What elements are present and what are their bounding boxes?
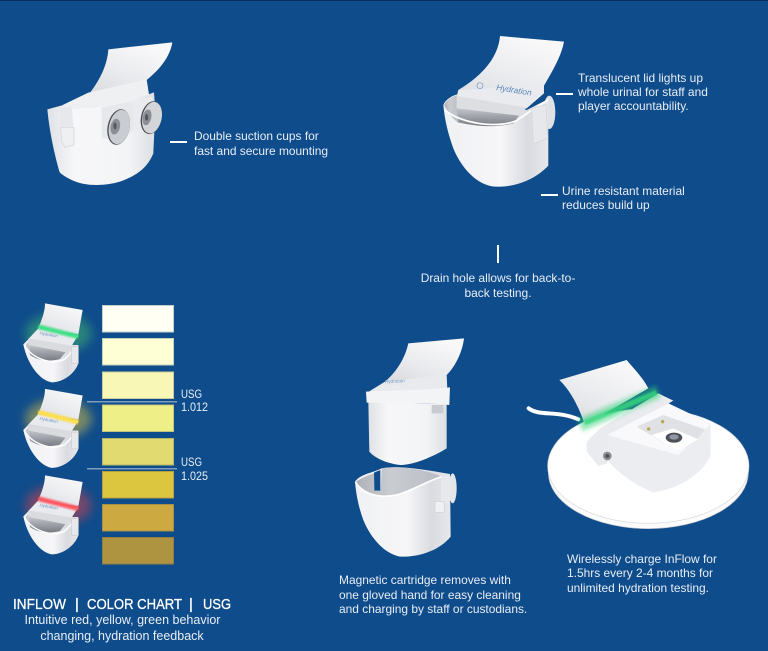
- device body: [587, 393, 711, 492]
- suction cup left: [104, 107, 133, 147]
- chart heading: USG: [203, 596, 231, 613]
- suction cup right: [138, 99, 165, 136]
- USG threshold 1.012: USG: [181, 387, 202, 401]
- lid logo: Hydration: [496, 82, 533, 98]
- suction cup edge: [543, 96, 555, 129]
- small device: green light: Hydration: [39, 330, 59, 339]
- label: wireless charge: [567, 552, 717, 595]
- label: wireless charge: 1.5hrs every 2-4 months for: [567, 566, 713, 580]
- device: cartridge on wireless charger: [529, 360, 749, 529]
- chart description: [25, 613, 220, 643]
- label: wireless charge: unlimited hydration testing.: [567, 581, 709, 595]
- label: magnetic cartridge: Magnetic cartridge removes with: [339, 573, 511, 587]
- flap: [559, 360, 648, 425]
- charger disc: [548, 409, 749, 529]
- label: drain hole: Drain hole allows for back-to-: [421, 271, 575, 285]
- label: urine resistant material: [541, 184, 685, 212]
- small device: yellow light: Hydration: [39, 416, 59, 424]
- USG threshold 1.012: 1.012: [181, 400, 208, 414]
- lid logo: [477, 82, 533, 98]
- chart description: Intuitive red, yellow, green behavior: [25, 613, 220, 627]
- cord: [529, 408, 578, 419]
- cartridge: Hydration: [385, 378, 405, 384]
- label: magnetic cartridge: [339, 573, 527, 616]
- chart heading: |: [189, 596, 193, 613]
- small device: yellow light: [23, 389, 92, 468]
- label: translucent lid: whole urinal for staff and: [577, 85, 708, 99]
- USG threshold 1.012: [87, 387, 208, 414]
- green light: [580, 392, 658, 425]
- label: drain hole: back testing.: [464, 286, 532, 300]
- chart heading: |: [75, 596, 79, 613]
- chart heading: INFLOW: [13, 596, 67, 613]
- USG threshold 1.025: [87, 455, 208, 483]
- device: magnetic cartridge removed from cup: [355, 338, 464, 557]
- label: urine resistant material: reduces build up: [562, 198, 650, 212]
- label: magnetic cartridge: and charging by staff or custodians.: [339, 602, 527, 616]
- label: translucent lid: [556, 71, 708, 113]
- small device: red light: Hydration: [39, 502, 59, 511]
- label: translucent lid: Translucent lid lights up: [578, 71, 703, 85]
- USG threshold 1.025: USG: [181, 455, 202, 469]
- label: double suction cups: Double suction cups for: [194, 129, 319, 143]
- chart description: changing, hydration feedback: [40, 629, 204, 643]
- label: urine resistant material: Urine resistant material: [562, 184, 685, 198]
- small device: green light: [23, 303, 92, 382]
- label: wireless charge: Wirelessly charge InFlow for: [567, 552, 717, 566]
- label: double suction cups: fast and secure mounting: [194, 144, 328, 158]
- chart heading: [13, 596, 231, 613]
- label: translucent lid: player accountability.: [578, 99, 689, 113]
- device: back view with double suction cups: [47, 42, 172, 185]
- label: double suction cups: [170, 129, 328, 158]
- device: front view with hydration lid: [443, 36, 564, 187]
- label: drain hole: [421, 245, 575, 300]
- cup: [355, 467, 457, 557]
- chart heading: COLOR CHART: [87, 596, 182, 613]
- label: magnetic cartridge: one gloved hand for easy cleaning: [339, 588, 521, 602]
- small device: red light: [23, 475, 92, 554]
- cartridge: [366, 338, 464, 465]
- urine color chart: [102, 306, 174, 564]
- USG threshold 1.025: 1.025: [181, 469, 208, 483]
